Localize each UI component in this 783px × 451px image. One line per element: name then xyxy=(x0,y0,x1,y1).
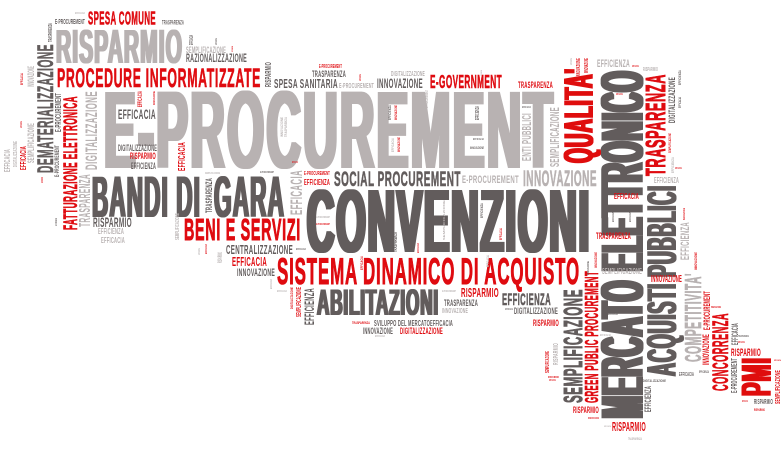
small words: inside E-PROCUREMENT xyxy=(118,90,531,213)
small words: north-east: SEMPLIFICAZIONE xyxy=(602,267,642,276)
small words: north-west: TRASPARENZA xyxy=(48,23,54,42)
small words: inside CONVENZIONI: TRASPARENZA xyxy=(393,232,399,252)
small words: north-west: RISPARMIO xyxy=(264,62,273,87)
small words: south and heel: EFFICACIA xyxy=(730,323,740,345)
small words: north-east: EFFICIENZA xyxy=(654,176,679,185)
small words: north-west: EFFICIENZA xyxy=(98,227,124,236)
word cloud in the shape of Italy: INNOVAZIONE xyxy=(523,166,597,191)
small words: above E-PROCUREMENT: E-PROCUREMENT xyxy=(339,83,374,90)
small words: south and heel: RISPARMIO xyxy=(573,405,599,415)
small words: centre: EFFICACIA xyxy=(430,319,453,328)
small words: north-east: EFFICIENZA xyxy=(670,157,675,173)
small words: south and heel: TRASPARENZA xyxy=(738,335,749,338)
word cloud in the shape of Italy: RISPARMIO xyxy=(56,21,183,74)
word cloud in the shape of Italy: RISPARMIO xyxy=(533,318,559,328)
small words: inside CONVENZIONI: E-PROCUREMENT xyxy=(316,222,330,226)
small words: above E-PROCUREMENT: EFFICACIA xyxy=(214,38,218,45)
small words: inside E-PROCUREMENT: INNOVAZIONE xyxy=(470,145,484,150)
word cloud in the shape of Italy: EFFICACIA xyxy=(138,91,144,107)
small words: north-east: INNOVAZIONE xyxy=(593,252,598,268)
small words: inside E-PROCUREMENT: TRASPARENZA xyxy=(204,178,214,213)
small words: inside CONVENZIONI: SEMPLIFICAZIONE xyxy=(442,200,446,240)
small words: inside E-PROCUREMENT: EFFICACIA xyxy=(522,105,531,109)
small words: centre: RISPARMIO xyxy=(218,252,224,263)
word cloud in the shape of Italy: E-GOVERNMENT xyxy=(430,72,502,92)
small words: north-west: EFFICACIA xyxy=(19,121,23,128)
small words: north-east: DIGITALIZZAZIONE xyxy=(667,77,677,123)
small words: south and heel: DIGITALIZZAZIONE xyxy=(643,378,666,383)
word cloud in the shape of Italy: EFFICACIA xyxy=(232,254,267,269)
word cloud in the shape of Italy: ABILITAZIONI xyxy=(317,282,439,323)
word cloud in the shape of Italy: SPESA COMUNE xyxy=(88,8,156,28)
small words: inside CONVENZIONI: EFFICIENZA xyxy=(304,178,330,187)
word cloud in the shape of Italy: SEMPLIFICAZIONE xyxy=(547,107,562,167)
word cloud in the shape of Italy: INNOVAZIONE xyxy=(584,58,590,73)
small words: north-west: INNOVAZIONE xyxy=(26,66,36,87)
small words: south and heel: SEMPLIFICAZIONE xyxy=(588,417,599,420)
small words: north-east: INNOVAZIONE xyxy=(586,261,590,275)
small words: south and heel: EFFICACIA xyxy=(742,400,748,403)
word cloud in the shape of Italy: CENTRALIZZAZIONE xyxy=(226,242,293,257)
small words: south and heel: EFFICACIA xyxy=(604,425,611,428)
small words: centre: SEMPLIFICAZIONE xyxy=(296,287,303,317)
word cloud in the shape of Italy: TRASPARENZA xyxy=(77,174,94,227)
word cloud in the shape of Italy: RISPARMIO xyxy=(461,285,499,300)
small words: north-west: EFFICACIA xyxy=(75,11,85,15)
word cloud in the shape of Italy: CONCORRENZA xyxy=(708,313,733,391)
small words: above E-PROCUREMENT: EFFICACIA xyxy=(231,46,234,52)
word cloud in the shape of Italy: E-PROCUREMENT xyxy=(424,90,429,108)
small words: south and heel: EFFICACIA xyxy=(738,340,745,344)
small words: north-west: E-PROCUREMENT xyxy=(54,93,63,132)
small words: north-east: INNOVAZIONE xyxy=(682,208,686,220)
small words: south and heel: EFFICACIA xyxy=(600,333,611,337)
small words: inside E-PROCUREMENT: EFFICACIA xyxy=(177,142,188,171)
small words: north-west: DIGITALIZZAZIONE xyxy=(13,141,19,167)
small words: inside E-PROCUREMENT: EFFICACIA xyxy=(292,160,298,164)
small words: inside CONVENZIONI xyxy=(296,171,503,253)
word cloud in the shape of Italy: RISPARMIO xyxy=(93,214,132,230)
small words: south and heel: SEMPLIFICAZIONE xyxy=(775,370,782,404)
small words: inside E-PROCUREMENT: TRASPARENZA xyxy=(283,117,288,137)
small words: south and heel: EFFICACIA xyxy=(679,372,694,378)
small words: inside CONVENZIONI: EFFICACIA xyxy=(416,243,420,253)
word cloud in the shape of Italy: PMI xyxy=(733,357,781,396)
word cloud in the shape of Italy: EFFICACIA xyxy=(287,170,306,215)
small words: centre: INNOVAZIONE xyxy=(363,326,393,336)
small words: inside CONVENZIONI: E-PROCUREMENT xyxy=(316,215,330,219)
word cloud in the shape of Italy: INNOVAZIONE xyxy=(237,267,275,279)
small words: inside E-PROCUREMENT: EFFICIENZA xyxy=(387,105,392,120)
small words: inside E-PROCUREMENT: EFFICACIA xyxy=(473,137,484,141)
word cloud in the shape of Italy: SEMPLIFICAZIONE xyxy=(186,45,226,55)
word cloud in the shape of Italy: PROCEDURE INFORMATIZZATE xyxy=(57,63,261,93)
small words: centre: INNOVAZIONE xyxy=(442,308,468,315)
small words: south and heel: TRASPARENZA xyxy=(628,436,642,441)
small words: inside E-PROCUREMENT: DIGITALIZZAZIONE xyxy=(118,143,157,153)
small words: north-east: EFFICACIA xyxy=(628,212,632,222)
small words: north-west: EFFICACIA xyxy=(19,73,24,85)
small words: inside E-PROCUREMENT: INNOVAZIONE xyxy=(279,117,284,137)
small words: north-west: E-PROCUREMENT xyxy=(55,145,61,177)
small words: centre: EFFICACIA xyxy=(269,279,273,289)
small words: north-east: EFFICACIA xyxy=(677,97,682,108)
small words: north-west: EFFICACIA xyxy=(40,177,44,183)
word cloud in the shape of Italy: SOCIAL PROCUREMENT xyxy=(334,168,461,191)
word cloud in the shape of Italy: COMPETITIVITA' xyxy=(680,273,706,362)
word cloud in the shape of Italy: RAZIONALIZZAZIONE xyxy=(186,51,247,65)
small words: centre: DIGITALIZZAZIONE xyxy=(289,287,294,309)
small words: inside CONVENZIONI: EFFICACIA xyxy=(296,247,306,251)
small words: north-east: SEMPLIFICAZIONE xyxy=(667,133,672,153)
small words: south and heel: RISPARMIO xyxy=(548,375,559,379)
small words: north-west: SEMPLIFICAZIONE xyxy=(175,213,181,240)
small words: centre: TRASPARENZA xyxy=(352,320,370,325)
small words: north-east: TRASPARENZA xyxy=(596,231,631,241)
small words: inside E-PROCUREMENT: EFFICIENZA xyxy=(475,106,481,120)
word cloud in the shape of Italy: EFFICIENZA xyxy=(502,290,551,309)
word cloud in the shape of Italy: GARA xyxy=(214,165,285,230)
small words: north-east xyxy=(569,58,698,276)
small words: north-east: INNOVAZIONE xyxy=(576,58,582,77)
small words: south and heel: RISPARMIO xyxy=(754,407,765,412)
small words: centre: EFFICACIA xyxy=(375,335,385,338)
small words: north-east: EFFICACIA xyxy=(614,192,639,201)
word cloud in the shape of Italy: BANDI DI xyxy=(92,165,201,230)
small words: south and heel: EFFICACIA xyxy=(608,313,618,316)
small words: north-west: E-PROCUREMENT xyxy=(55,19,85,26)
small words: inside CONVENZIONI: EFFICACIA xyxy=(498,228,503,240)
small words: south and heel: INNOVAZIONE xyxy=(711,306,721,309)
small words: above E-PROCUREMENT: DIGITALIZZAZIONE xyxy=(391,71,425,78)
word cloud in the shape of Italy: EFFICACIA xyxy=(569,58,573,65)
word cloud in the shape of Italy: GREEN PUBLIC PROCUREMENT xyxy=(582,271,602,403)
small words: above E-PROCUREMENT: EFFICACIA xyxy=(358,74,362,81)
small words: centre: EFFICACIA xyxy=(359,256,364,270)
word cloud in the shape of Italy: RISPARMIO xyxy=(612,419,646,434)
small words: centre: EFFICACIA xyxy=(197,248,201,255)
small words: south and heel xyxy=(545,291,782,441)
word cloud in the shape of Italy: EFFICACIA xyxy=(118,106,156,122)
small words: centre: SVILUPPO DEL MERCATO xyxy=(374,319,430,328)
small words: centre: EFFICACIA xyxy=(505,307,513,311)
small words: above E-PROCUREMENT: EFFICACIA xyxy=(480,70,483,76)
small words: south and heel: EFFICIENZA xyxy=(699,369,709,374)
word cloud in the shape of Italy: EFFICACIA xyxy=(189,35,195,45)
word cloud in the shape of Italy: TRASPARENZA xyxy=(518,80,553,90)
small words: north-east: EFFICIENZA xyxy=(677,70,682,85)
word: E-PROCUREMENT (light, centre): E-PROCUREMENT xyxy=(462,174,519,186)
small words: centre xyxy=(197,244,559,338)
small words: north-west xyxy=(3,11,273,245)
word cloud in the shape of Italy: SEMPLIFICAZIONE xyxy=(558,289,588,403)
small words: inside E-PROCUREMENT: EFFICACIA xyxy=(390,138,395,152)
small words: north-west: SEMPLIFICAZIONE xyxy=(26,123,36,163)
small words: inside E-PROCUREMENT: EFFICIENZA xyxy=(131,161,156,171)
small words: inside CONVENZIONI: E-PROCUREMENT xyxy=(304,171,330,177)
small words: centre: TRASPARENZA xyxy=(444,298,478,308)
word cloud in the shape of Italy: EFFICIENZA xyxy=(678,222,692,260)
small words: north-east: EFFICACIA xyxy=(675,166,682,170)
small words: south and heel: INNOVAZIONE xyxy=(701,334,711,365)
word cloud in the shape of Italy: EFFICIENZA xyxy=(301,288,317,325)
small words: inside E-PROCUREMENT: E-PROCUREMENT xyxy=(260,170,274,174)
small words: inside E-PROCUREMENT: SEMPLIFICAZIONE xyxy=(205,171,220,175)
small words: north-west: EFFICACIA xyxy=(19,146,28,170)
small words: centre: E-PROCUREMENT xyxy=(442,289,456,293)
small words: north-east: EFFICACIA xyxy=(616,92,623,96)
word cloud in the shape of Italy: E-PROCUREMENT xyxy=(702,291,712,330)
small words: above E-PROCUREMENT: TRASPARENZA xyxy=(312,69,346,79)
small words: north-east: INNOVAZIONE xyxy=(693,252,698,270)
small words: inside E-PROCUREMENT: INNOVAZIONE xyxy=(152,91,156,105)
small words: south and heel: E-PROCUREMENT xyxy=(730,358,739,393)
small words: north-west: EFFICACIA xyxy=(101,236,125,245)
small words: north-west: EFFICACIA xyxy=(54,218,58,226)
small words: south and heel: EFFICIENZA xyxy=(643,386,653,412)
small words: centre: DIGITALIZZAZIONE xyxy=(400,326,443,336)
word cloud in the shape of Italy: DIGITALIZZAZIONE xyxy=(514,306,558,316)
small words: inside E-PROCUREMENT: INNOVAZIONE xyxy=(393,105,398,120)
small words: north-west: TRASPARENZA xyxy=(162,20,184,26)
small words: above E-PROCUREMENT: E-PROCUREMENT xyxy=(319,64,342,70)
small words: north-east: RISPARMIO xyxy=(643,67,658,73)
word cloud in the shape of Italy: ENTI PUBBLICI xyxy=(519,113,534,161)
small words: centre: EFFICACIA xyxy=(485,255,490,267)
small words: north-east: EFFICACIA xyxy=(632,64,639,68)
word cloud in the shape of Italy: DIGITALIZZAZIONE xyxy=(82,91,101,170)
word cloud in the shape of Italy: EFFICIENZA xyxy=(597,58,630,70)
small words: south and heel: SEMPLIFICAZIONE xyxy=(545,351,551,373)
small words: inside E-PROCUREMENT: INNOVAZIONE xyxy=(396,137,401,152)
small words: north-west: EFFICACIA xyxy=(3,149,12,172)
small words: north-east: EFFICACIA xyxy=(611,212,615,222)
small words: south and heel: EFFICACIA xyxy=(549,378,556,382)
small words: above E-PROCUREMENT xyxy=(189,35,553,90)
word cloud in the shape of Italy: INNOVAZIONE xyxy=(651,274,682,285)
word cloud in the shape of Italy: INNOVAZIONE xyxy=(377,75,423,91)
small words: inside CONVENZIONI: EFFICIENZA xyxy=(479,203,484,218)
small words: south and heel: RISPARMIO xyxy=(553,343,560,365)
small words: centre: EFFICACIA xyxy=(277,289,287,293)
small words: centre: EFFICACIA xyxy=(204,244,208,254)
small words: inside E-PROCUREMENT: RISPARMIO xyxy=(130,151,156,161)
word: SPESA SANITARIA: SPESA SANITARIA xyxy=(274,76,338,91)
word cloud in the shape of Italy: BENI E SERVIZI xyxy=(184,212,301,247)
